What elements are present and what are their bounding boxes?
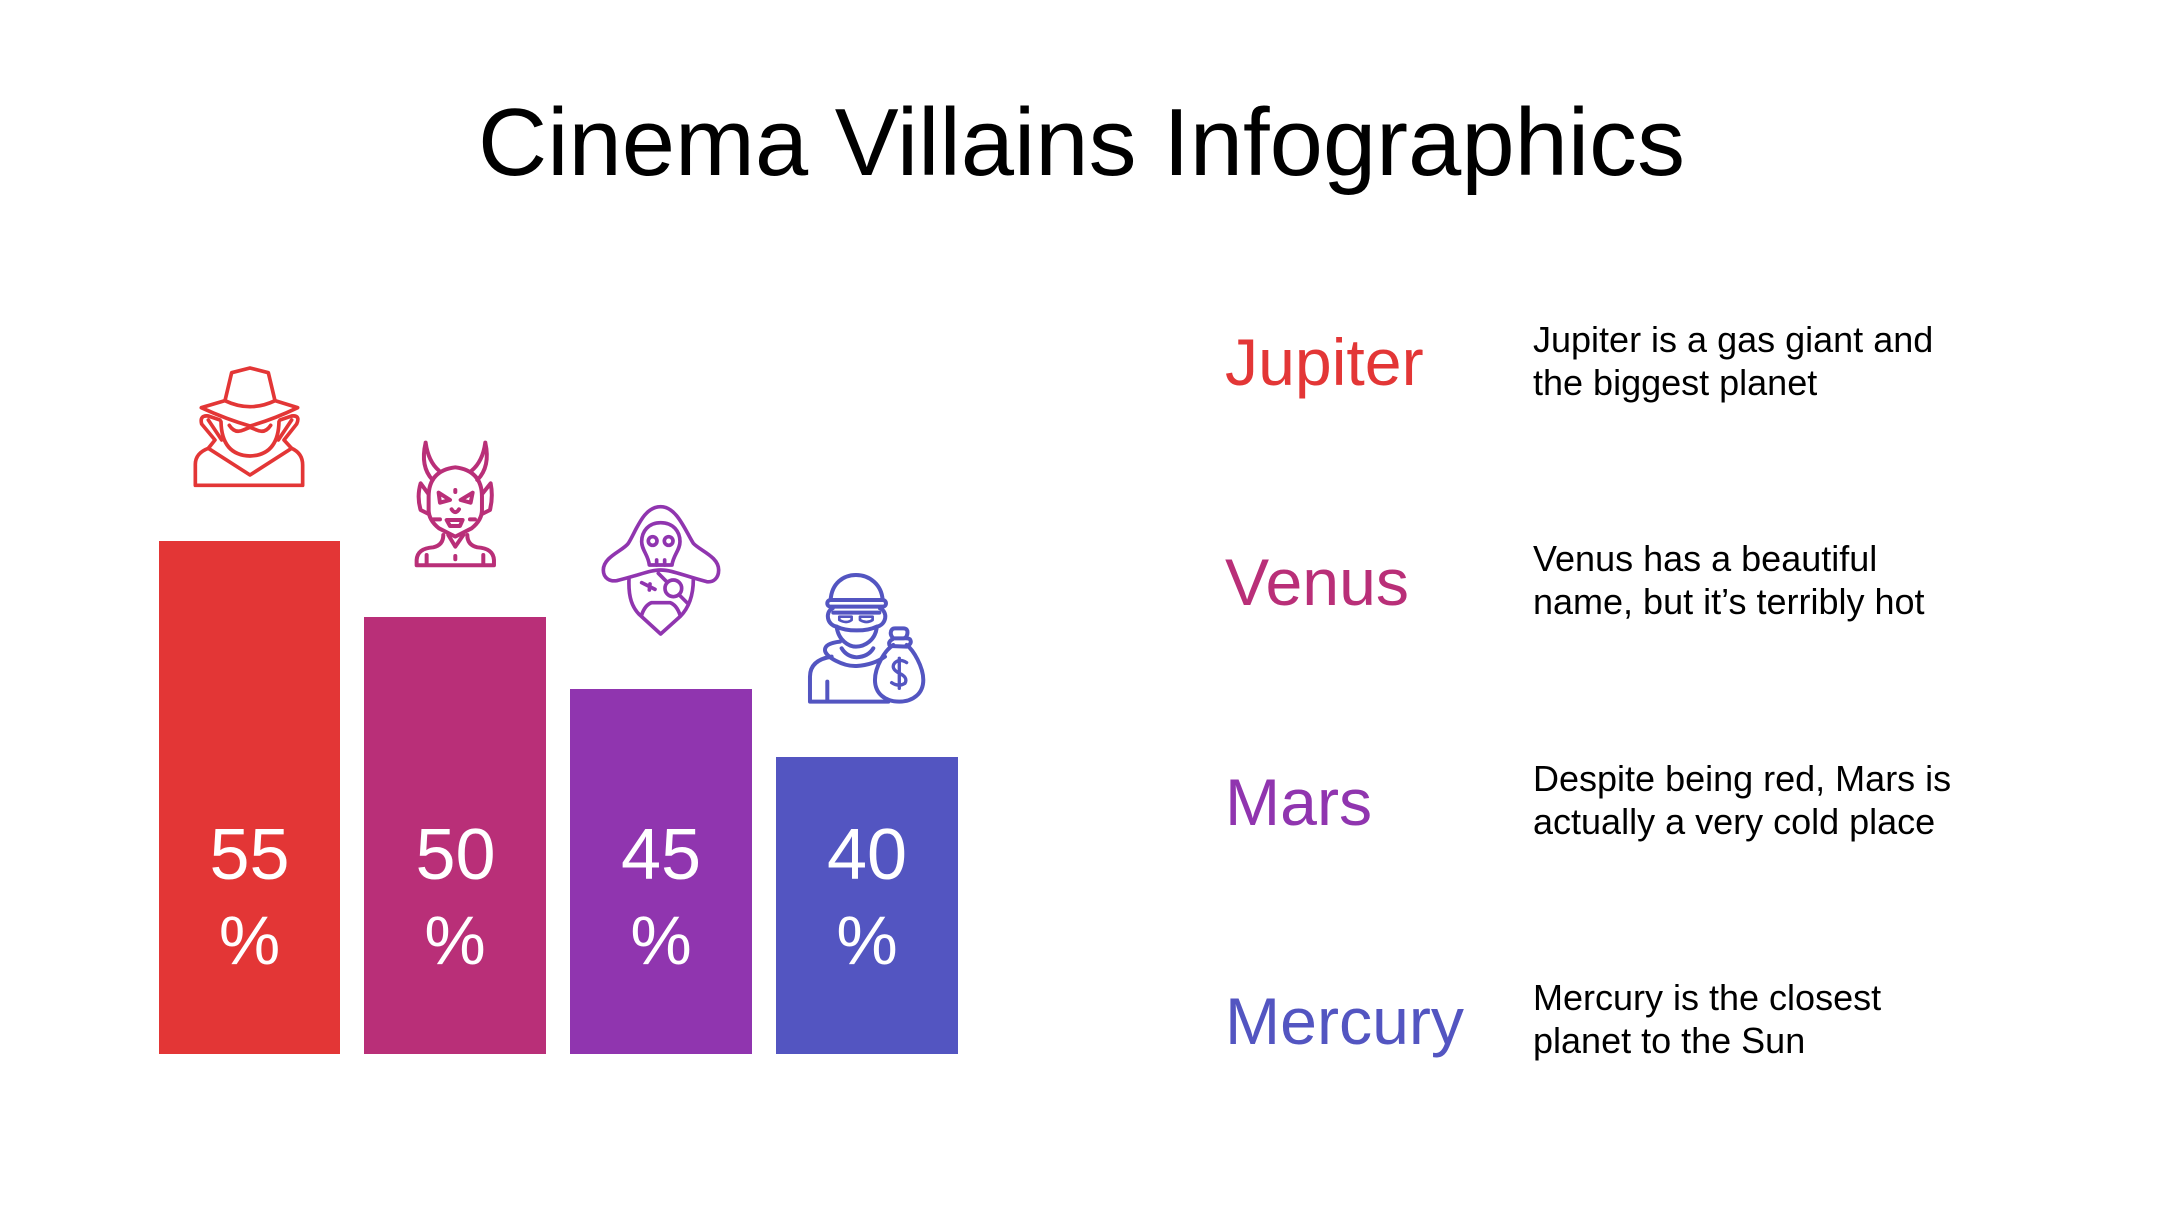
icon: devil: [417, 443, 494, 565]
bar: 45%: 45: [621, 815, 701, 895]
text: Mars description: [1533, 758, 1951, 842]
heading: Mars: Mars: [1225, 766, 1372, 840]
text: Mars description: Despite being red, Mars is: [1533, 758, 1951, 799]
text: Venus description: [1533, 538, 1925, 622]
text: Mars description: actually a very cold place: [1533, 801, 1935, 842]
bar: 50%: 50: [415, 815, 496, 895]
text: Venus description: Venus has a beautiful: [1533, 538, 1877, 579]
bar: 40%: 40: [827, 815, 907, 895]
text: Mercury description: planet to the Sun: [1533, 1020, 1805, 1061]
heading: Jupiter: Jupiter: [1225, 326, 1424, 400]
bar: 40%: [776, 757, 958, 1054]
icon: spy with hat: [195, 368, 303, 485]
bar: 55%: 55: [209, 815, 290, 895]
icon: pirate skull: [603, 507, 719, 634]
text: Venus description: name, but it’s terribly hot: [1533, 581, 1925, 622]
bar: 50%: %: [424, 902, 486, 979]
icon: robber with money bag: [810, 575, 923, 702]
heading: Venus: Venus: [1225, 546, 1409, 620]
bar: 40%: %: [836, 902, 898, 979]
text: Jupiter description: Jupiter is a gas giant and: [1533, 319, 1933, 360]
bar: 45%: %: [630, 902, 692, 979]
text: Jupiter description: [1533, 319, 1933, 403]
bar: 55%: [159, 541, 340, 1054]
title: Cinema Villains Infographics: [478, 89, 1685, 196]
bar: 45%: [570, 689, 752, 1054]
text: Mercury description: Mercury is the closest: [1533, 977, 1881, 1018]
heading: Mercury: Mercury: [1225, 985, 1464, 1059]
bar: 50%: [364, 617, 546, 1054]
text: Mercury description: [1533, 977, 1881, 1061]
bar: 55%: %: [219, 902, 280, 979]
text: Jupiter description: the biggest planet: [1533, 362, 1817, 403]
